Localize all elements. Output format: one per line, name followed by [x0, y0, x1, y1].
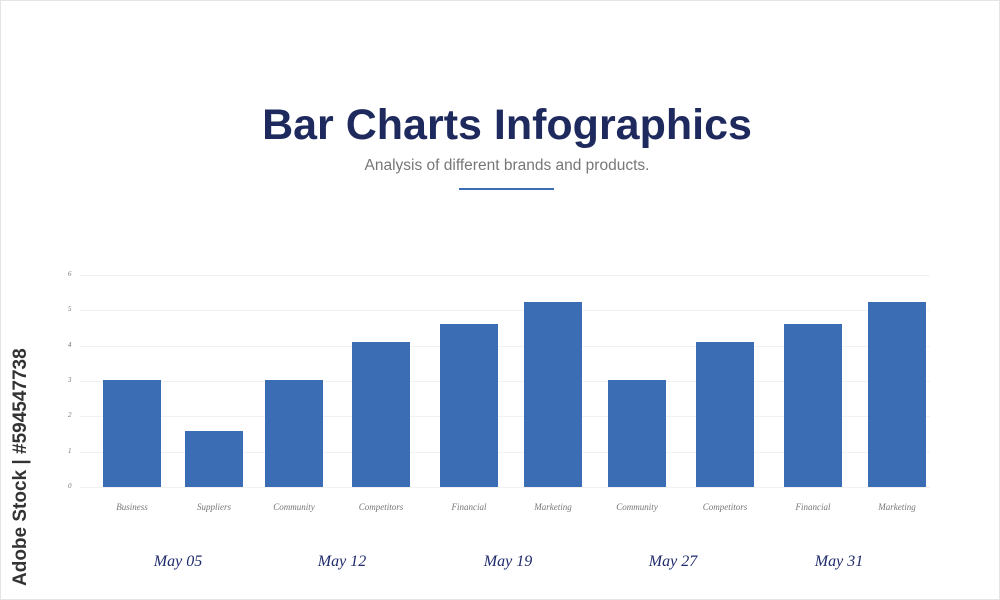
date labels: May 05 [154, 553, 202, 570]
title: Bar Charts Infographics [262, 101, 752, 149]
bar chart: 3 [68, 376, 72, 384]
category labels: Competitors [359, 502, 403, 512]
category labels: Suppliers [197, 502, 231, 512]
date labels: May 19 [484, 553, 532, 570]
category labels [116, 502, 916, 512]
date labels: May 27 [649, 553, 697, 570]
category labels: Business [116, 502, 148, 512]
subtitle: Analysis of different brands and products. [365, 157, 649, 174]
bar chart [68, 270, 930, 490]
category labels: Marketing [534, 502, 572, 512]
date labels: May 12 [318, 553, 366, 570]
bar chart: 1 [68, 447, 72, 455]
date labels: May 31 [815, 553, 863, 570]
bar chart: 5 [68, 305, 72, 313]
bar chart: 4 [68, 341, 72, 349]
category labels: Marketing [878, 502, 916, 512]
category labels: Community [273, 502, 315, 512]
category labels: Community [616, 502, 658, 512]
bar chart: 2 [68, 411, 72, 419]
bar chart: 6 [68, 270, 72, 278]
divider accent line [459, 188, 554, 190]
bar chart: 0 [68, 482, 72, 490]
category labels: Financial [452, 502, 486, 512]
date labels [154, 553, 863, 570]
category labels: Financial [796, 502, 830, 512]
watermark vertical text: Adobe Stock | #594547738 [10, 348, 31, 586]
category labels: Competitors [703, 502, 747, 512]
